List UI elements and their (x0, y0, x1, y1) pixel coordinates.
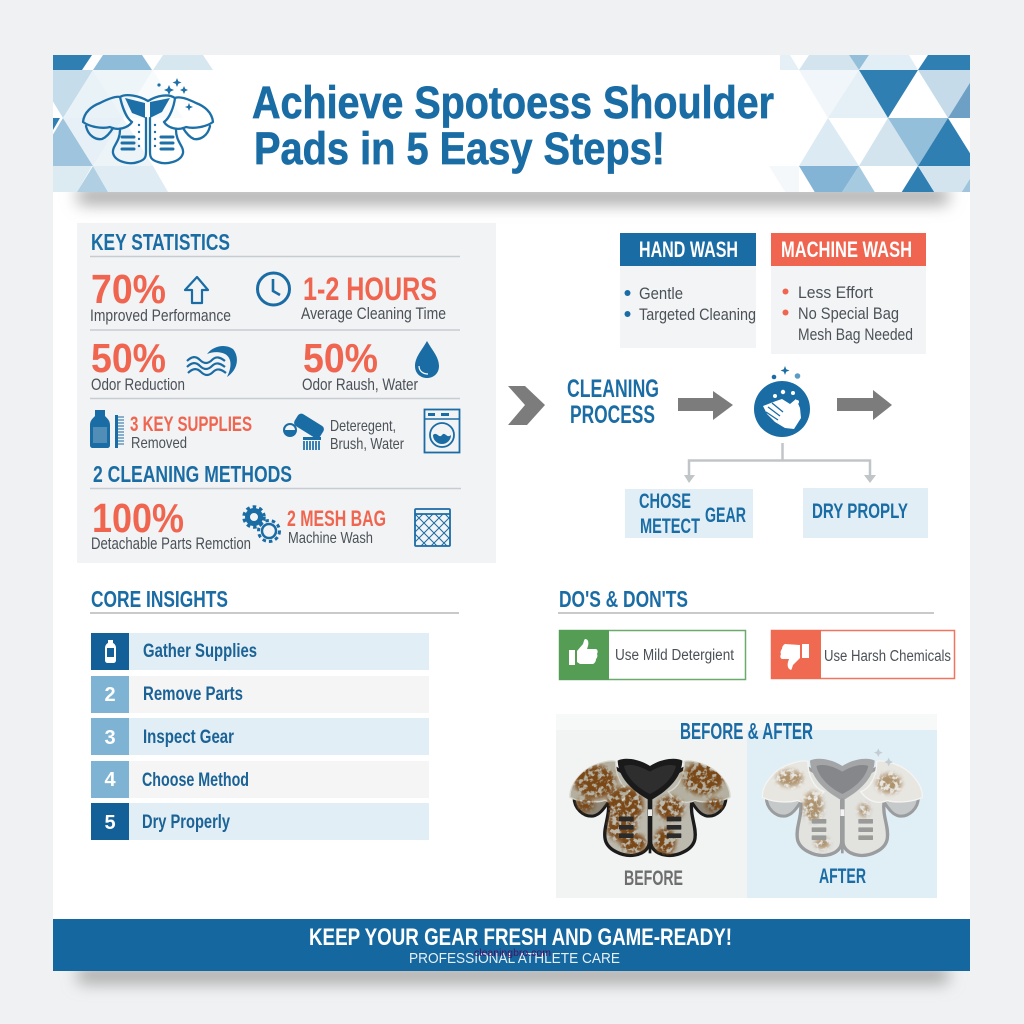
stat: 2 mesh bag: Machine Wash (288, 530, 373, 547)
list: machine wash benefits: Mesh Bag Needed (798, 325, 913, 344)
list: machine wash benefits: Less Effort (798, 283, 873, 302)
step 2: remove parts (91, 676, 429, 713)
icon: shoulder pads logo (83, 78, 213, 163)
panel: machine wash (771, 233, 926, 354)
box: chose metect gear: METECT (640, 515, 700, 538)
list: machine wash benefits: No Special Bag (798, 304, 899, 323)
panel: do's and don'ts (558, 586, 954, 680)
heading: do's and don'ts: DO'S & DON'TS (559, 586, 688, 612)
footer drop shadow (78, 967, 948, 983)
panel: machine wash: MACHINE WASH (781, 237, 912, 262)
stat: 100% detachable parts (91, 495, 251, 553)
list: hand wash benefits: Targeted Cleaning (639, 305, 756, 324)
box: chose metect gear: GEAR (705, 504, 746, 527)
heading: cleaning process (567, 375, 659, 429)
stat: 1-2 hours: Average Cleaning Time (301, 305, 446, 323)
heading: cleaning process: PROCESS (570, 401, 655, 429)
stat: 2 mesh bag (287, 506, 386, 547)
stat: 3 key supplies: Removed (131, 435, 187, 452)
panel: key statistics (77, 223, 496, 563)
do: use mild detergent (559, 630, 746, 680)
step 5: dry properly: Dry Properly (142, 812, 230, 833)
stat: 50% odor raush, water: 50% (303, 335, 378, 381)
panel: hand wash (620, 233, 756, 348)
list: hand wash benefits (624, 284, 756, 324)
step 5: dry properly: 5 (104, 812, 116, 834)
step 2: remove parts: Remove Parts (143, 684, 243, 705)
footer headline: KEEP YOUR GEAR FRESH AND GAME-READY! (309, 924, 732, 951)
step 2: remove parts: 2 (104, 684, 116, 706)
box: dry proply (803, 488, 928, 538)
step 3: inspect gear: Inspect Gear (143, 727, 234, 748)
box: chose metect gear (625, 489, 753, 538)
icon: detergent bottle and brush (90, 410, 124, 448)
icon: up arrow (185, 277, 208, 303)
left triangle pattern (53, 55, 213, 192)
list: machine wash benefits (782, 283, 913, 344)
footer banner (53, 919, 970, 971)
stat: 100% detachable parts: Detachable Parts Remction (91, 535, 251, 553)
heading: core insights: CORE INSIGHTS (91, 586, 228, 612)
step 4: choose method: 4 (104, 769, 116, 791)
icon: gears (244, 507, 280, 542)
image: cleaned shoulder pads (756, 748, 929, 860)
stat: 1-2 hours (301, 271, 446, 323)
arrow: process to washing (678, 391, 733, 420)
step 3: inspect gear (91, 718, 429, 755)
heading: key statistics: KEY STATISTICS (91, 229, 230, 255)
stat: 3 key supplies: 3 KEY SUPPLIES (130, 413, 252, 436)
text: detergent, brush, water (330, 418, 405, 453)
box: dry proply: DRY PROPLY (812, 500, 908, 523)
don't: use harsh chemicals: Use Harsh Chemicals (824, 648, 951, 665)
stat: 100% detachable parts: 100% (92, 495, 184, 541)
heading: 2 cleaning methods: 2 CLEANING METHODS (93, 461, 292, 487)
title (252, 77, 774, 174)
icon: washing machine (424, 410, 460, 452)
heading: cleaning process: CLEANING (567, 375, 659, 403)
label: after: AFTER (819, 865, 866, 888)
box: chose metect gear: CHOSE (639, 490, 691, 513)
branching connector arrows (684, 443, 876, 483)
watermark: cleaningbro.com (474, 947, 551, 959)
icon: clock (258, 273, 290, 305)
stat: 70% improved performance: Improved Performance (90, 307, 231, 325)
heading: before and after: BEFORE & AFTER (680, 718, 813, 744)
icon: waves (187, 346, 237, 377)
title: Achieve Spotoess Shoulder (252, 77, 774, 128)
header banner (53, 55, 970, 192)
step 4: choose method (91, 761, 429, 798)
step 3: inspect gear: 3 (104, 727, 116, 749)
panel: core insights (90, 586, 459, 840)
step 5: dry properly (91, 803, 429, 840)
do: use mild detergent: Use Mild Detergient (615, 647, 735, 664)
step 1: gather supplies: Gather Supplies (143, 641, 257, 662)
label: before: BEFORE (624, 867, 683, 890)
stat: 50% odor reduction: Odor Reduction (91, 376, 185, 394)
step 1: gather supplies (91, 633, 429, 670)
icon: mesh bag (415, 509, 450, 546)
stat: 50% odor reduction (91, 335, 185, 394)
arrow: process continues (837, 390, 892, 420)
stat: 70% improved performance: 70% (91, 266, 166, 312)
image: dirty shoulder pads (569, 758, 731, 858)
stat: 3 key supplies (130, 413, 252, 452)
step 4: choose method: Choose Method (142, 770, 249, 791)
banner drop shadow (78, 188, 948, 204)
title: Pads in 5 Easy Steps! (254, 123, 665, 174)
icon: water drop (415, 341, 439, 378)
icon: sponge and brush (284, 412, 325, 450)
don't: use harsh chemicals (771, 630, 954, 679)
stat: 50% odor raush, water: Odor Raush, Water (302, 376, 418, 394)
footer subtitle: PROFESSIONAL ATHLETE CARE (409, 950, 620, 967)
text: detergent, brush, water: Brush, Water (330, 436, 405, 453)
stat: 50% odor reduction: 50% (91, 335, 166, 381)
icon: chevron arrow (508, 386, 545, 425)
right triangle pattern (770, 55, 970, 192)
stat: 50% odor raush, water (302, 335, 418, 394)
stat: 70% improved performance (90, 266, 231, 325)
panel: before and after (556, 714, 937, 898)
panel: hand wash: HAND WASH (639, 237, 738, 262)
list: hand wash benefits: Gentle (639, 284, 683, 303)
stat: 1-2 hours: 1-2 HOURS (303, 271, 437, 307)
stat: 2 mesh bag: 2 MESH BAG (287, 506, 386, 531)
icon: washing hands (754, 366, 810, 437)
text: detergent, brush, water: Deteregent, (330, 418, 396, 435)
